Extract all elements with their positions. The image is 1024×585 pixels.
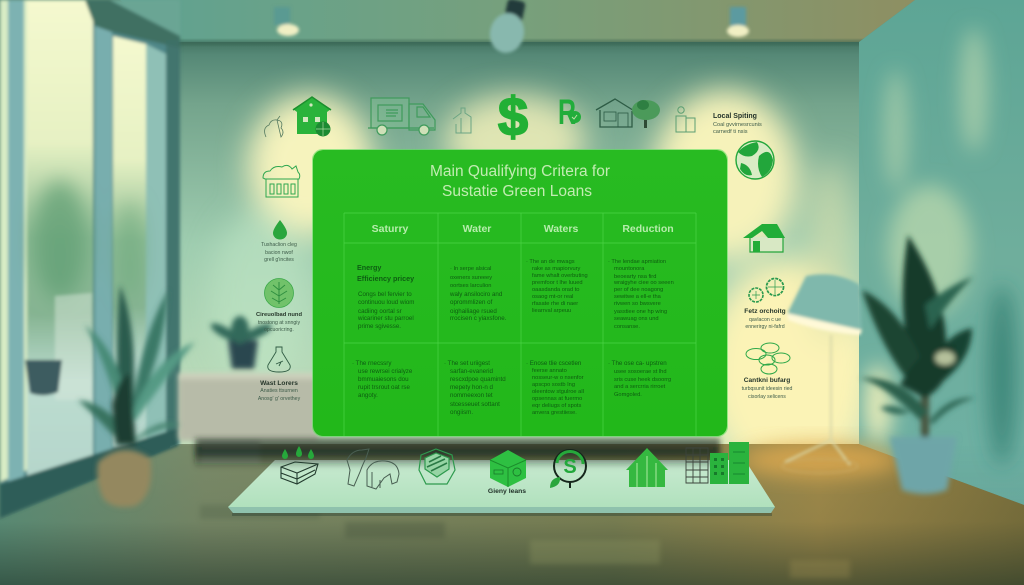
sofa and small plant: [178, 316, 318, 463]
cell: water: oighailiage rsued: [450, 308, 497, 315]
view through window: [32, 180, 143, 300]
left icon column: [256, 165, 302, 402]
cell: water note: sarfan-evanerid: [450, 368, 494, 375]
spotlight: left: [274, 7, 299, 36]
cell: waters note: nosseur-w o nsenfor: [532, 375, 584, 381]
right icon column: [742, 224, 792, 400]
cell: waters note: · Enose tlie cscetlen: [526, 360, 582, 367]
cell: waters: fame whalt overbuting: [532, 273, 588, 279]
icon: cloud tiles with caption: cisorlay selicens: [748, 394, 786, 400]
cell: water: oprommlizen of: [450, 299, 493, 306]
cell: energy note: use rewrsei crialyze: [358, 368, 413, 375]
cell: energy efficiency: prime sgivesse.: [358, 323, 401, 330]
cell: water: waly ansilociro and: [449, 291, 503, 298]
cell: waters note: oleentow stgulroe all: [532, 389, 584, 395]
cell: reduction: per of dee noagong: [614, 287, 663, 293]
cell: energy note: · The rnecssry: [352, 360, 392, 367]
label: local spiting: Local Spiting: [713, 113, 757, 120]
floor planks: [200, 505, 850, 578]
cell: waters note: anvera grestiiese.: [532, 410, 577, 416]
icon: water drop with caption: [261, 220, 297, 263]
windows: [0, 0, 180, 518]
cell: waters note: apscpo sostb Ing: [532, 382, 575, 388]
icon: leaf circle with caption: tnostong at snngiy: [258, 320, 300, 326]
icon: flowers with caption: Fetz orchoitg: [744, 308, 786, 315]
floor: [0, 444, 1024, 585]
icon: dollar sign: $: [498, 87, 528, 147]
icon: cloud tiles with caption: [742, 343, 792, 400]
bowl on ledge: [25, 360, 62, 395]
right floor plant: [860, 235, 975, 494]
cell: water: oortses larculion: [450, 283, 491, 289]
cell: waters: · The an de mwags: [526, 259, 575, 265]
shadow under panel: [195, 438, 720, 468]
spotlight: right: [727, 7, 749, 37]
cell: waters note: eqr deliugs of spots: [532, 403, 581, 409]
rug: [195, 438, 775, 516]
cell: reduction: seawuag ons und: [614, 316, 659, 322]
ceiling spotlights: [274, 0, 749, 56]
icon: green cube with caption: Gieny Ieans: [488, 488, 526, 495]
icon: globe: [736, 141, 774, 179]
icon: flask with caption: [258, 347, 301, 402]
cell: waters: premfoor t lhe luued: [532, 280, 583, 286]
icon: leaf circle with caption: Cireuolbad nund: [256, 312, 302, 318]
cell: waters: rfasate rhe di naer: [532, 301, 578, 307]
row 2 text: [352, 360, 671, 416]
cell: waters note: opsennas at fuermo: [532, 396, 582, 402]
cell: water: rrocisen c yiaxsfone.: [450, 315, 507, 322]
table headers: Waters: [544, 223, 578, 235]
icon: drops over box: [281, 446, 318, 484]
cell: waters: osaog mt-or real: [532, 294, 573, 300]
table headers: Reduction: [622, 223, 674, 235]
back wall: [170, 38, 865, 453]
icon: building with cloud: [263, 165, 300, 197]
floor lamp: [782, 274, 862, 473]
icon: flask with caption: Anosg' g' orvethey: [258, 396, 301, 402]
bottom icon row: [281, 442, 749, 495]
row 1 text: [357, 259, 674, 330]
cell: water note: ongiism.: [450, 409, 473, 416]
cell: energy efficiency: cadiing oortal sr: [358, 308, 402, 315]
icon: water drop with caption: Tushaclion cleg: [261, 242, 297, 248]
cell: energy efficiency: [357, 263, 414, 330]
table headers: Saturry: [372, 223, 409, 235]
top icon row: [265, 87, 774, 179]
cell: waters note: [526, 360, 584, 416]
cell: reduction note: · The ose ca- upstren: [608, 360, 667, 367]
icon: house and tree: [596, 99, 660, 128]
cell: waters: [526, 259, 588, 314]
icon: person and building: [676, 107, 695, 132]
cell: energy efficiency: continuou loud wiom: [358, 299, 414, 306]
cell: waters: liearrval arpeuu: [532, 308, 571, 314]
icon: magnifier with S: S: [563, 456, 577, 478]
label: local spiting: Coal gvvirnesrcunis: [713, 122, 762, 128]
cell: reduction note: sris cuse heek dsoorrg: [614, 377, 671, 383]
cell: reduction note: Gomgoled.: [614, 392, 642, 398]
cell: energy efficiency: Congs bel fervier to: [358, 291, 412, 298]
cell: water note: rescxdpoe quamintd: [450, 376, 506, 383]
cell: reduction: [608, 259, 674, 330]
ceiling: [120, 0, 915, 42]
cell: reduction: sewitwe a ell-e tha: [614, 294, 662, 300]
cell: water note: [444, 360, 506, 416]
icon: water drop with caption: bacion nwof: [265, 250, 293, 256]
cell: energy efficiency: Energy: [357, 263, 381, 272]
icon: leaf circle with caption: opcuoricring.: [264, 327, 294, 333]
icon: green house: [293, 97, 331, 136]
cell: energy efficiency: wicariner stu parroel: [357, 315, 414, 322]
title: Main Qualifying Critera for: [430, 163, 610, 180]
label: local spiting: carnedf ti nsis: [713, 129, 748, 135]
icon: leaf circle with caption: [256, 278, 302, 333]
cell: waters: oaasdanda orad to: [532, 287, 579, 293]
icon: cloud tiles with caption: Cantkni bufarg: [744, 377, 790, 384]
table headers: [372, 223, 674, 235]
cell: energy note: rupit trsrout oat rse: [358, 384, 410, 391]
cell: energy note: [352, 360, 413, 399]
cell: water note: stcesseuet sottant: [450, 401, 500, 408]
icon: small box figure: [453, 108, 471, 133]
cell: water: [449, 266, 507, 322]
cell: reduction: yasstiee one hp wing: [614, 309, 667, 315]
cell: reduction: consanse.: [614, 324, 640, 330]
title: [430, 163, 610, 200]
icon: water drop with caption: grell g'incites: [264, 257, 294, 263]
cell: reduction: wraigyhe ciee oo seeen: [613, 280, 674, 286]
right wall: [859, 0, 1024, 505]
cell: reduction: rivwen so bwsvere: [614, 301, 661, 307]
icon: green letter mark: R: [558, 93, 576, 132]
table grid: [344, 213, 696, 436]
cell: water: oxeners sureeey: [450, 275, 492, 281]
icon: grid and buildings: [686, 442, 749, 484]
icon: green barn: [626, 448, 668, 487]
icon: shield: [419, 449, 455, 484]
cell: reduction: · The lendae apmiation: [608, 259, 666, 265]
icon: green roof house: [743, 224, 785, 252]
cell: energy efficiency: Efficiency pricey: [357, 274, 414, 283]
cell: waters: rake as mapiorvury: [532, 266, 581, 272]
icon: cloud tiles with caption: turbqsunit ideesin ried: [742, 386, 792, 392]
cell: reduction note: and a sercrria rirroet: [614, 384, 666, 390]
cell: water note: mepety hon-n d: [450, 384, 494, 391]
cell: waters note: feerse annato: [532, 368, 567, 374]
icon: cloud apple: [265, 116, 283, 137]
icon: animals outline: [347, 449, 399, 489]
table headers: Water: [463, 223, 491, 235]
icon: delivery truck: [368, 98, 435, 135]
icon: flask with caption: Wast Lorers: [260, 380, 298, 387]
cell: water note: · The set uriigest: [444, 360, 490, 367]
cell: energy note: angoty.: [358, 392, 378, 399]
icon: flowers with caption: [744, 278, 786, 330]
wall lighting: [210, 90, 875, 480]
icon: green cube with caption: [488, 450, 526, 495]
main panel: [312, 150, 728, 436]
cell: energy note: bmmuaiesons dou: [358, 376, 409, 383]
cell: water: · In serpe alsical: [450, 266, 491, 272]
cell: reduction: mountonora: [614, 266, 645, 272]
icon: flask with caption: Anaties ttsurnen: [260, 388, 298, 394]
cell: reduction: beoearty nsa fird: [614, 274, 656, 280]
icon: flowers with caption: qavlacon c ue: [749, 317, 781, 323]
icon: magnifier with S: [550, 450, 586, 488]
left floor plant: [78, 285, 195, 507]
icon: flowers with caption: ennerirgy ni-fafrd: [745, 324, 785, 330]
spotlight: centre: [486, 0, 528, 56]
cell: water note: nommeexon tet: [450, 392, 493, 399]
label: local spiting: [713, 113, 762, 135]
cell: reduction note: usee sosoerae st lhd: [614, 369, 666, 375]
title: Sustatie Green Loans: [442, 183, 592, 200]
cell: reduction note: [608, 360, 671, 398]
